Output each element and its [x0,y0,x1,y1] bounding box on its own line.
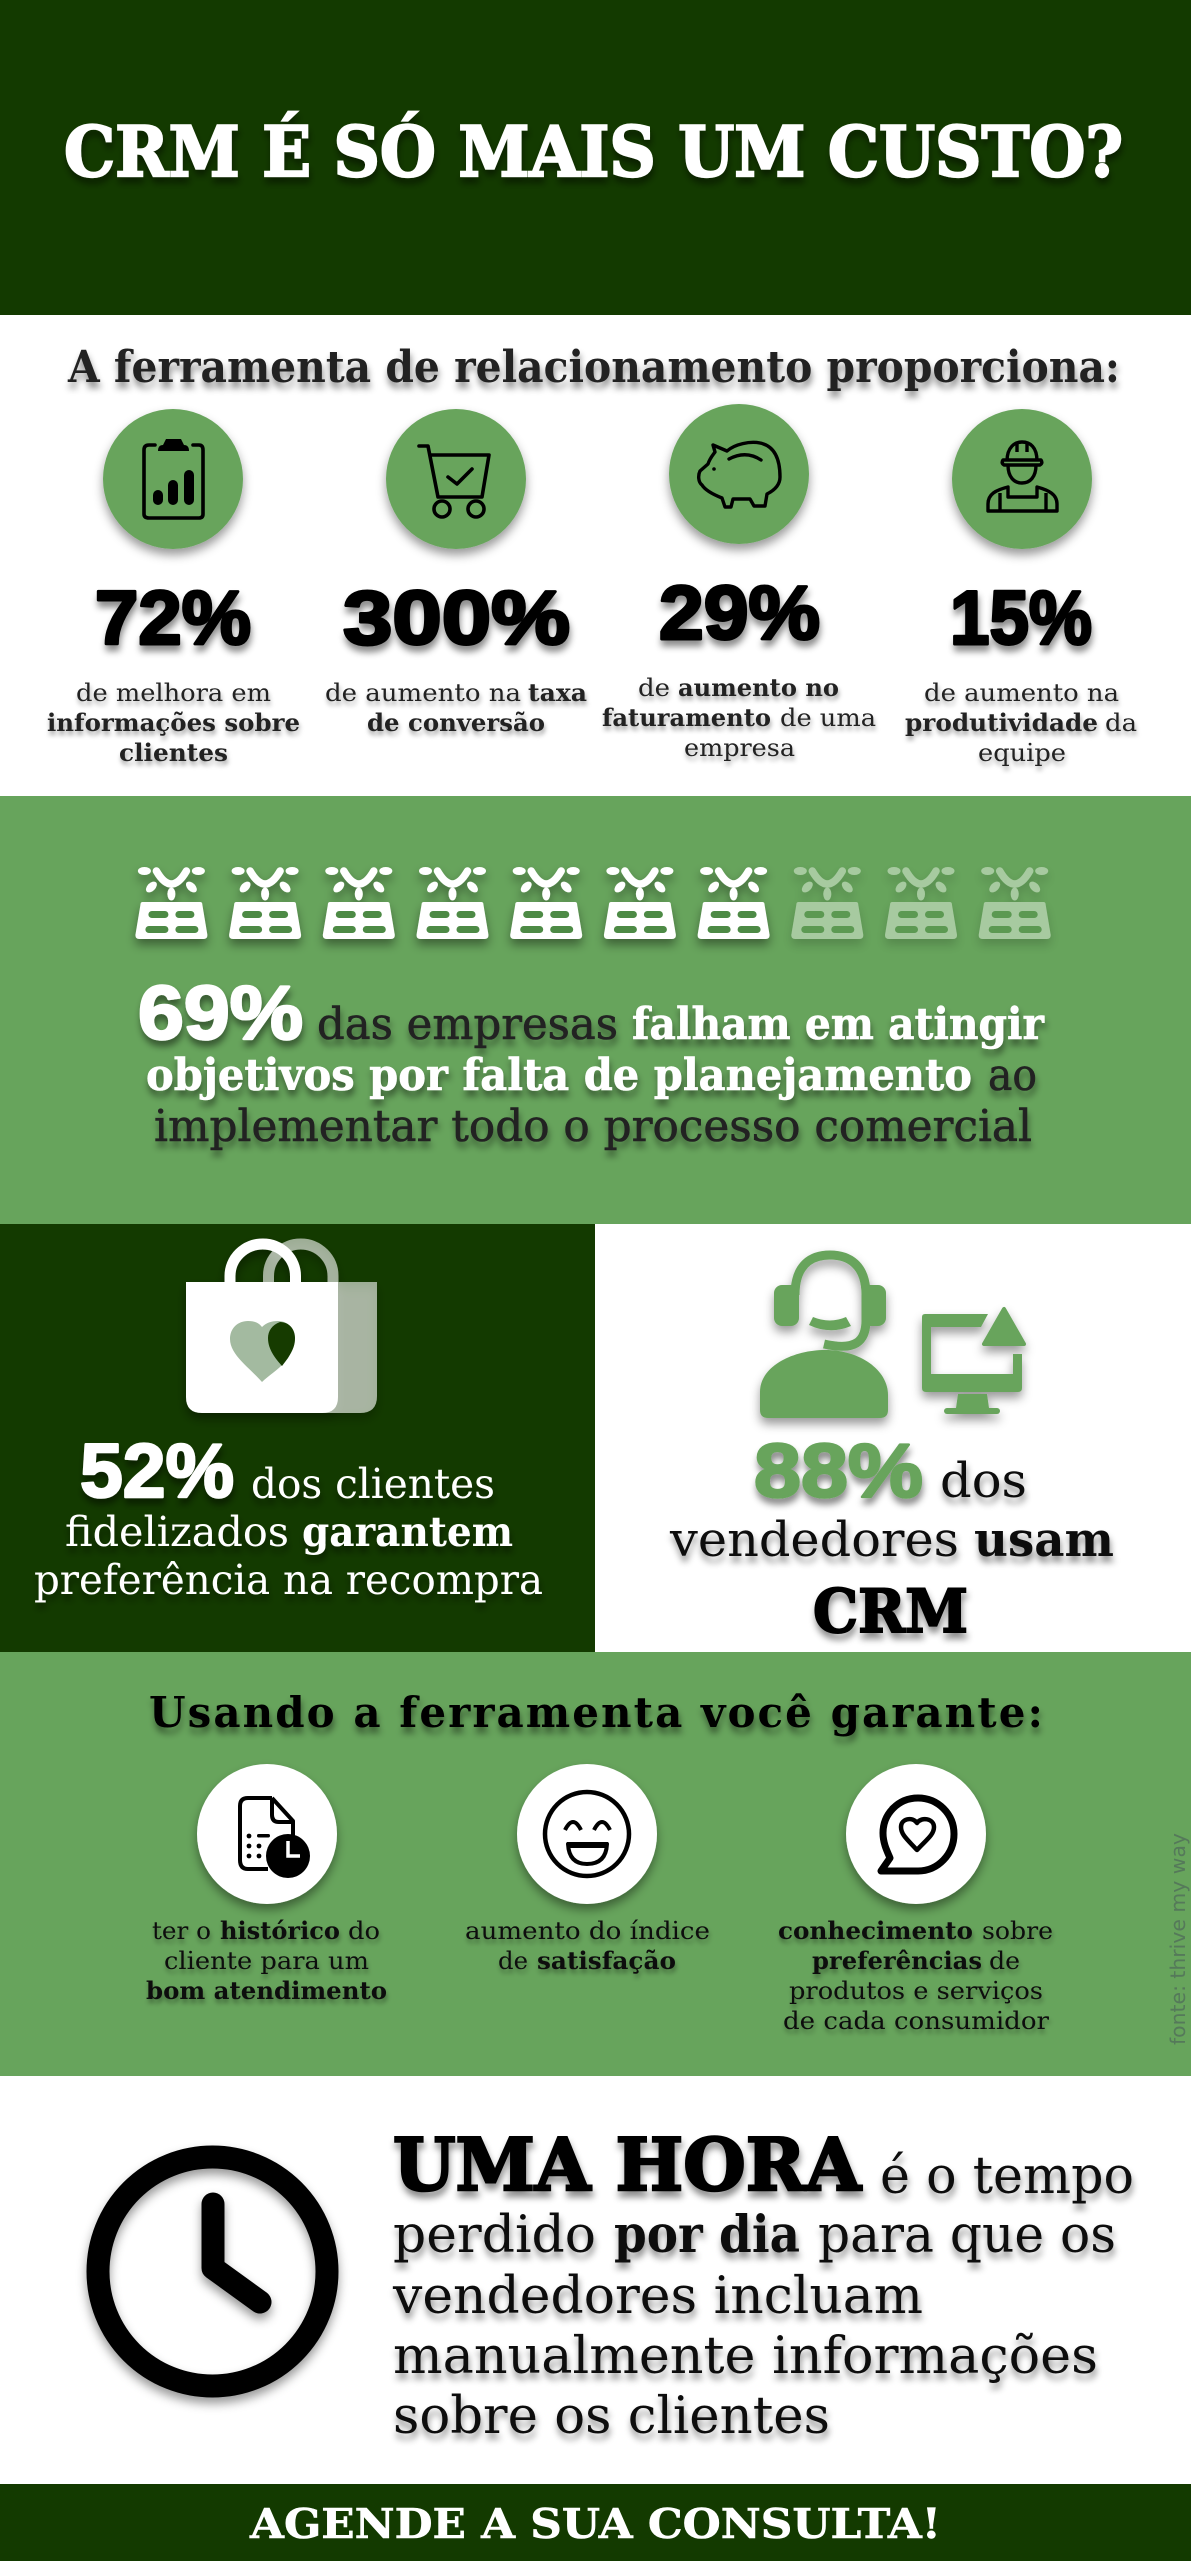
text: 29% description: de uma [780,704,876,732]
text: 29% description: faturamento [602,703,771,732]
text: 88% statement: usam [974,1512,1114,1568]
icon: worker [952,409,1092,549]
text: one hour statement: manualmente informações [393,2327,1098,2386]
text: one hour statement: perdido [393,2206,596,2265]
text: histórico: do [348,1917,380,1945]
text: 69% statement: ao [988,1050,1037,1101]
call to action text: AGENDE A SUA CONSULTA! [249,2500,941,2548]
text: conhecimento: de cada consumidor [783,2007,1050,2035]
panel: 88% [595,1224,1191,1652]
text: conhecimento: produtos e serviços [789,1977,1043,2005]
text: 69% statement: das empresas [317,999,618,1050]
text: conhecimento: sobre [982,1917,1053,1945]
text: 52% statement: garantem [302,1508,513,1556]
text: 88% statement: CRM [813,1577,968,1647]
text: 15% description: produtividade [905,708,1098,737]
panel: 52% [0,1224,595,1652]
text: one hour statement [392,2122,1134,2446]
icon: clock [98,2157,327,2386]
panel: one hour [0,2076,1191,2484]
text: 29% description: aumento no [678,673,839,702]
benefit: 29% [602,404,876,762]
stat: 29%: 29% [659,571,820,656]
text: 52% statement: dos clientes [251,1460,495,1508]
text: 72% description: informações sobre [47,708,300,737]
text: histórico [146,1916,387,2005]
text: 52% statement: fidelizados [65,1508,289,1556]
text: satisfação: de [498,1947,528,1975]
guarantee: histórico [146,1764,387,2005]
text: 88% statement: vendedores [669,1512,959,1568]
text: conhecimento [778,1916,1053,2035]
text: histórico: cliente para um [164,1947,369,1975]
text: 69% statement: falham em atingir [632,999,1045,1050]
text: histórico: ter o [152,1917,211,1945]
text: 15% description: equipe [978,739,1066,767]
text: conhecimento: de [989,1947,1020,1975]
text: conhecimento: preferências [812,1946,982,1975]
text: 300% description [325,678,587,737]
panel: footer call to action [0,2484,1191,2561]
text: 29% description: de [638,674,670,702]
text: 300% description: de aumento na [325,679,521,707]
icon: speech bubble with heart [846,1764,986,1904]
text: 72% description: clientes [119,738,228,767]
text: 72% description: de melhora em [76,679,271,707]
text: 69% statement [138,971,1045,1152]
text: 15% description: da [1105,709,1137,737]
title: CRM É SÓ MAIS UM CUSTO? [64,111,1123,193]
text: 300% description: taxa [528,678,587,707]
icon: cart [386,409,526,549]
text: histórico: bom atendimento [146,1976,387,2005]
benefits heading: A ferramenta de relacionamento proporciona: [67,342,1120,393]
text: conhecimento: conhecimento [778,1916,973,1945]
text: 88% statement: dos [940,1453,1027,1509]
text: one hour statement: sobre os clientes [393,2387,830,2446]
text: 300% description: de conversão [367,708,545,737]
text: histórico: histórico [220,1916,340,1945]
icon: smiling face [517,1764,657,1904]
text: 88% statement [669,1429,1114,1647]
stat: 15%: 15% [950,576,1092,661]
panel: benefits [0,315,1191,796]
guarantees heading: Usando a ferramenta você garante: [149,1688,1043,1737]
text: one hour statement: para que os [818,2206,1116,2265]
stat: 300%: 300% [343,576,570,661]
text: 29% description [602,673,876,762]
text: 52% statement: 52% [80,1429,234,1514]
icon: piggy bank [669,404,809,544]
text: 52% statement [34,1429,543,1604]
text: 15% description: de aumento na [924,679,1119,707]
source note: fonte: thrive my way [1166,1833,1190,2045]
text: one hour statement: vendedores incluam [392,2267,923,2326]
benefit: 72% [47,409,300,767]
text: satisfação: aumento do índice [465,1917,710,1945]
stat: 72%: 72% [95,576,251,661]
panel: 69% [0,796,1191,1224]
text: 69% statement: objetivos por falta de planejamento [146,1050,972,1101]
text: one hour statement: por dia [614,2205,800,2265]
icon: document with clock [197,1764,337,1904]
text: 69% statement: implementar todo o processo comercial [154,1101,1032,1152]
text: 69% statement: 69% [138,971,303,1056]
text: satisfação [465,1917,710,1975]
panel: guarantees [0,1652,1191,2076]
guarantee: conhecimento [778,1764,1053,2035]
text: satisfação: satisfação [537,1946,676,1975]
icon row: solar panels 7 of 10 [135,867,1051,939]
text: one hour statement: é o tempo [880,2147,1134,2206]
benefit: 300% [325,409,587,737]
guarantee: satisfação [465,1764,710,1975]
panel: header [0,0,1191,315]
icon: shopping bag with heart [186,1244,377,1413]
text: 88% statement: 88% [754,1429,923,1514]
text: one hour statement: UMA HORA [393,2122,862,2207]
text: 72% description [47,679,300,767]
text: 52% statement: preferência na recompra [34,1556,543,1604]
icon: clipboard chart [103,409,243,549]
text: 15% description [905,679,1137,767]
benefit: 15% [905,409,1137,767]
text: 29% description: empresa [684,734,795,762]
icon: agent with headset and monitor [760,1255,1024,1418]
